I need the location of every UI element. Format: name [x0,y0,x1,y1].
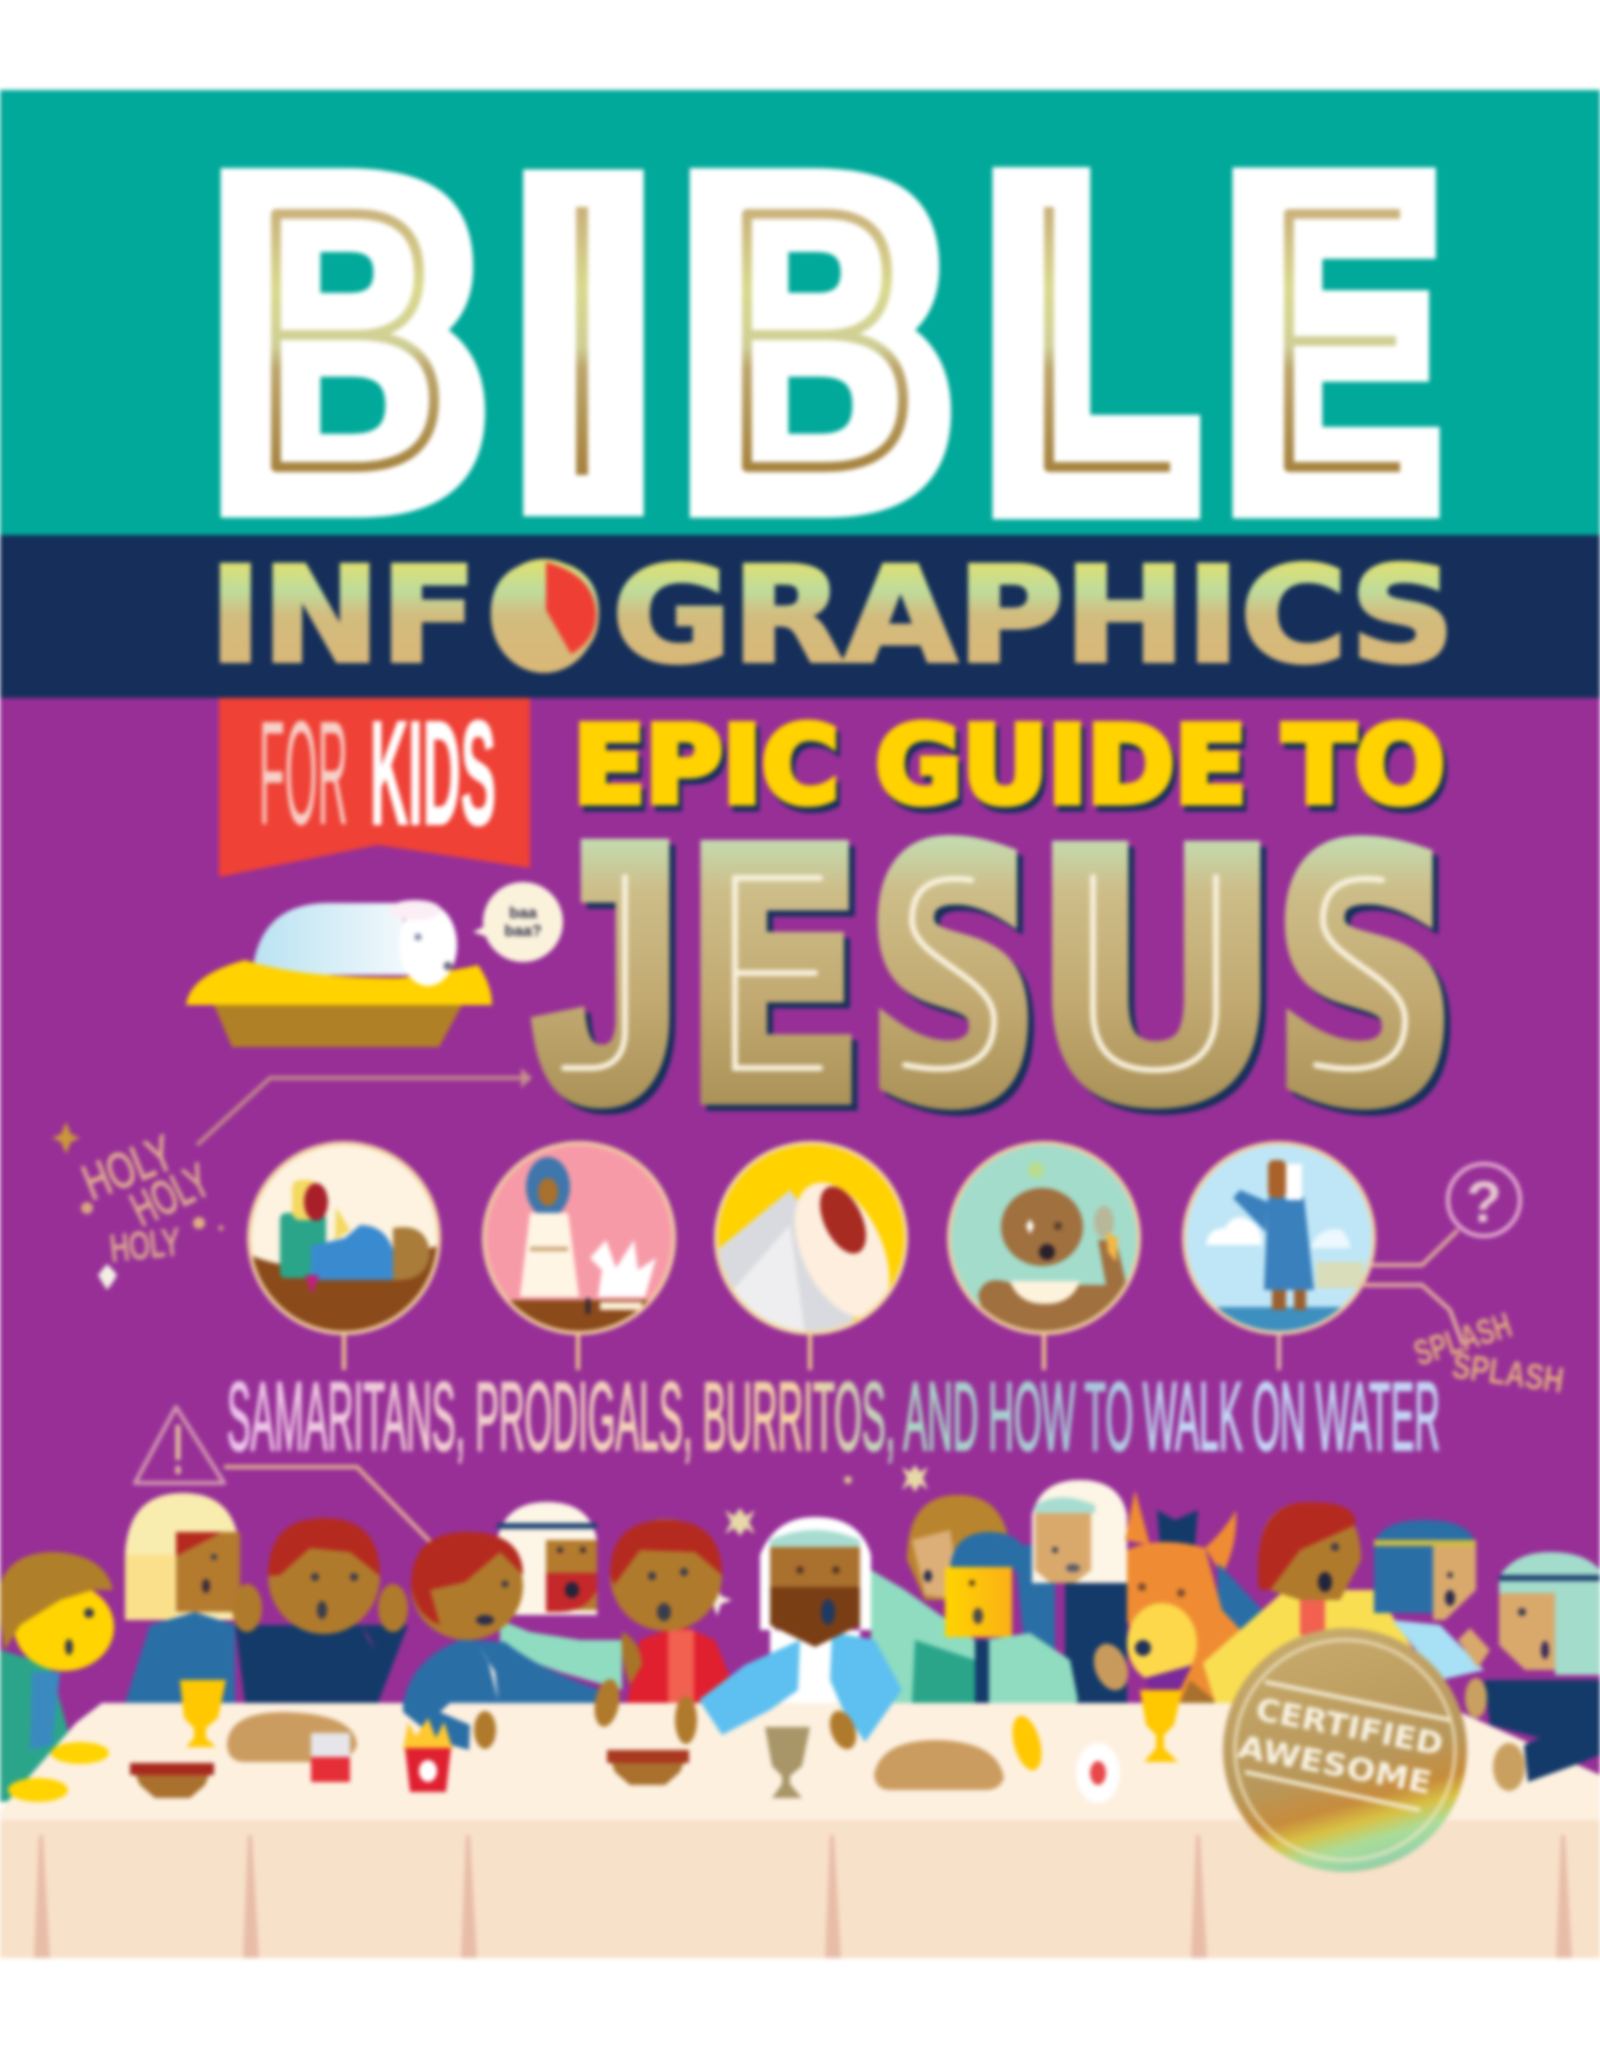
illustration: table [0,1703,1600,1958]
reaching hand [591,1677,623,1729]
heading: JESUS: U [1034,787,1278,1172]
speech bubble: baa: baa [509,905,537,922]
icon: lamb in manger [186,900,492,1047]
panel: baby illustration [949,1143,1139,1370]
title: BIBLE: B [666,94,967,608]
banner: FOR KIDS [219,691,530,877]
disciple: blue hat [1374,1520,1490,1680]
panel: walking on water illustration [1170,1143,1390,1370]
illustration: last supper disciples [0,1480,1600,1802]
sparkles [52,1122,928,1616]
callout: splash splash [1361,1285,1566,1401]
heading: EPIC GUIDE TO: EPIC GUIDE TO [577,710,1449,833]
heading: JESUS: E [686,786,861,1171]
title: INFOGRAPHICS: O [486,539,604,693]
yellow shoes [8,1742,109,1802]
text: holy holy holy: HOLY [75,1124,181,1211]
tan hand right [1493,1743,1525,1791]
icon: warning triangle [135,1407,451,1563]
blue sleeve on table [403,1700,470,1750]
hand [474,1711,496,1749]
disciple: yellow face blue cap [945,1532,1078,1748]
disciple: red hair yellow robe [1203,1502,1420,1703]
title: INFOGRAPHICS: INF [209,539,477,693]
disciple: tan hair behind [907,1495,1010,1600]
disciple: navy hood [1014,1480,1127,1703]
title: INFOGRAPHICS: GRAPHICS [612,539,1455,693]
callout: question mark: ? [1466,1170,1502,1235]
donkey [1088,1490,1262,1703]
heading: JESUS: S [1282,792,1459,1177]
disciple: cream veil [125,1493,240,1703]
drink cup [311,1733,350,1782]
callout: splash splash: SPLASH [1450,1345,1566,1401]
heading: JESUS: J [537,774,678,1168]
illustration: figures leaning on table [8,1517,1600,1802]
disciple: red robe [610,1519,735,1703]
lamb head [389,900,457,986]
navy sleeve right [1484,1680,1600,1782]
jesus [675,1517,902,1753]
seal: certified awesome: CERTIFIED [1253,1692,1446,1763]
panel: burrito illustration [712,1143,909,1370]
title: BIBLE [196,93,1454,609]
yellow hand [1007,1713,1047,1773]
heading: JESUS: S [870,787,1036,1172]
title: BIBLE: I [492,93,676,609]
cup with red dot [1076,1743,1120,1803]
title: BIBLE: B [196,95,501,609]
bowl [607,1750,689,1785]
heading: JESUS: E [692,792,867,1177]
gold goblet [180,1680,226,1747]
text: holy holy holy: HOLY [123,1154,218,1237]
title: INFOGRAPHICS [209,539,1455,693]
heading: JESUS: S [876,793,1042,1178]
speech bubble: baa [473,882,563,962]
disciple: green tunic yellow face [0,1552,114,1802]
title: BIBLE: E [1211,94,1454,609]
bread loaf [227,1712,357,1762]
text: KIDS [370,691,496,856]
banner: FOR KIDS: FOR [259,691,348,856]
bread loaf [874,1740,1004,1790]
disciple: navy shirt [232,1518,408,1703]
title: BIBLE: L [979,105,1192,597]
disciple: mint hat [1499,1552,1600,1675]
icon: pie chart letter O [491,559,597,673]
text: holy holy holy: HOLY [108,1221,182,1270]
panel: samaritan illustration [249,1143,440,1370]
arrow: holy callout to title [197,1068,532,1145]
heading: JESUS: U [1040,793,1284,1178]
disciple: red hair blue coat [403,1532,600,1722]
illustration: table food and cups [130,1680,1182,1803]
disciple: mint robe [871,1570,978,1703]
disciple: mint sleeve behind [500,1620,622,1690]
disciple: white headdress back [497,1502,597,1615]
seal: certified awesome: AWESOME [1235,1729,1435,1802]
panel: prodigal son illustration [480,1143,680,1370]
heading: EPIC GUIDE TO: EPIC GUIDE TO [573,704,1445,827]
heading: JESUS [537,774,1459,1178]
text: holy holy holy [75,1124,218,1270]
heading: JESUS: S [1276,786,1453,1171]
speech bubble: baa: baa? [504,923,542,940]
callout: splash splash: SPLASH [1409,1304,1517,1374]
bowl [130,1763,214,1798]
heading: JESUS: J [543,780,684,1174]
fries [403,1718,453,1792]
gold goblet [1140,1690,1182,1762]
callout: question mark [1371,1164,1520,1265]
olive goblet [765,1727,810,1798]
seal: certified awesome [1223,1628,1467,1872]
